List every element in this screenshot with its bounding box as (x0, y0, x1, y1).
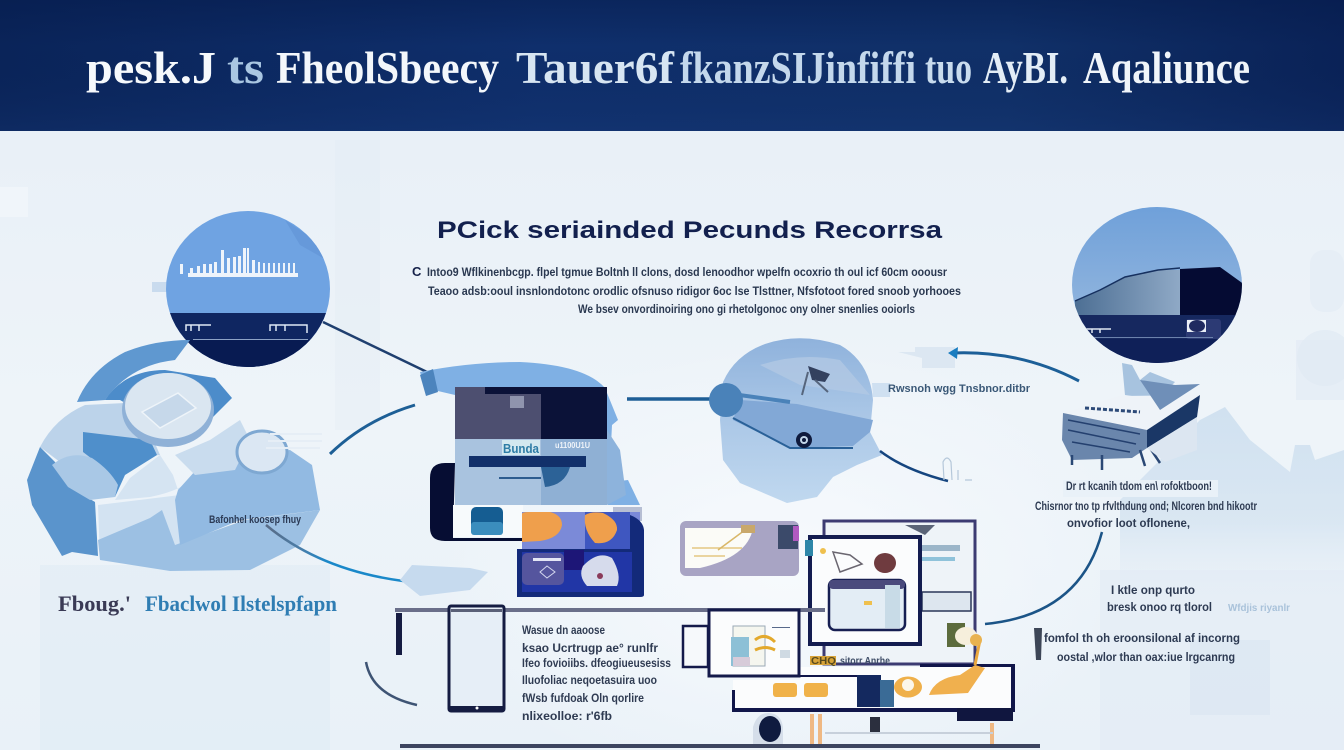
screen window: u1100U1U (555, 441, 590, 450)
base panel (732, 627, 1015, 721)
lower left label (58, 591, 337, 616)
connector: left circle to window (323, 322, 427, 372)
label: left blob: Bafonhel koosep fhuy (209, 514, 302, 526)
right text block A: onvofior loot oflonene, (1067, 518, 1190, 530)
right text block B: oostal ,wlor than oax:iue lrgcanrng (1057, 652, 1235, 664)
title: tuo (925, 42, 972, 93)
text list: nlixeolloe: r'6fb (522, 709, 612, 723)
header band (0, 0, 1344, 131)
text list: fWsb fufdoak Oln qorlire (522, 691, 644, 705)
text list: Wasue dn aaoose (522, 623, 605, 637)
intro paragraph: Teaoo adsb:ooul insnlondotonc orodlic ofsnuso ridigor 6oc lse Tlsttner, Nfsfotoot fored snoob yorhooes (428, 284, 961, 298)
right text block A: Chisrnor tno tp rfvlthdung ond; Nlcoren bnd hikootr (1035, 501, 1257, 513)
table illustration (1062, 363, 1200, 470)
arrow to right icon (952, 353, 1079, 381)
orange caption: CHQ (811, 656, 836, 667)
connector: blob curve (330, 405, 415, 454)
title: pesk.J (86, 42, 216, 93)
knob on connector (420, 369, 438, 396)
title (86, 42, 1250, 93)
title: Tauer6f (516, 42, 675, 93)
orange caption (810, 656, 890, 667)
dark card with swatch (430, 463, 525, 541)
blue blob behind window (420, 362, 640, 505)
right text block A (1035, 481, 1257, 530)
title: fkanzSIJinfiffi (680, 42, 916, 93)
right text block B (1044, 585, 1240, 664)
small monitor back-left (683, 626, 708, 667)
circle icon: skyline bar chart (166, 211, 330, 367)
connector: center blob downward (880, 451, 948, 481)
screen window: Bunda (503, 441, 540, 456)
pale box by arrow (898, 347, 955, 368)
media tile panel (517, 507, 644, 597)
side bar (396, 613, 402, 655)
note card (680, 521, 799, 576)
title: AyBI. (983, 42, 1068, 93)
bottom rule (400, 744, 1040, 748)
connector: window to center blob (627, 397, 712, 401)
screen window (455, 387, 626, 505)
bottom devices (753, 713, 993, 748)
faint cloud lower-left of panel (400, 565, 488, 596)
right text block B: I ktle onp qurto (1111, 585, 1195, 597)
faint side note: Wfdjis riyanlr (1228, 603, 1290, 614)
intro paragraph: We bsev onvordinoiring ono gi rhetolgonoc ony olner snenlies ooiorls (578, 302, 915, 316)
text list: Iluofoliac neqoetasuira uoo (522, 673, 657, 687)
intro paragraph: Intoo9 Wflkinenbcgp. flpel tgmue Boltnh ll clons, dosd lenoodhor wpelfn ocoxrio th oul icf 60cm ooousr (427, 265, 947, 279)
shelf rule (395, 608, 825, 612)
section heading: PCick seriainded Pecunds Recorrsa (437, 217, 943, 244)
blob cluster: left (27, 340, 322, 571)
circle icon: right hill (1072, 207, 1242, 363)
title: FheolSbeecy (276, 42, 499, 93)
connector: left blob to lower label (266, 525, 403, 581)
lower left label: Fboug.' (58, 591, 131, 616)
text list: ksao Ucrtrugp ae° runlfr (522, 641, 658, 655)
right text block A: Dr rt kcanih tdom en\ rofoktboon! (1066, 481, 1212, 493)
intro paragraph (412, 264, 961, 316)
text list: Ifeo fovioiibs. dfeogiueusesiss (522, 656, 671, 670)
title: ts (227, 42, 264, 93)
right connector (985, 532, 1102, 624)
label: center right: Rwsnoh wgg Tnsbnor.ditbr (888, 383, 1031, 395)
center blob (709, 338, 890, 503)
orange caption: sitorr Anrhe (840, 656, 890, 667)
round lens (122, 373, 214, 447)
title: Aqaliunce (1083, 42, 1250, 93)
text list (522, 623, 671, 723)
lower left label: Fbaclwol Ilstelspfapn (145, 591, 337, 616)
small pale icon by connector (943, 458, 972, 480)
intro paragraph: C (412, 264, 422, 279)
front monitor (805, 537, 920, 644)
tablet icon (449, 606, 504, 711)
small icon: post (1034, 628, 1042, 660)
back monitor (824, 521, 975, 664)
right text block B: bresk onoo rq tlorol (1107, 602, 1212, 614)
right text block B: fomfol th oh eroonsilonal af incorng (1044, 633, 1240, 645)
middle monitor (709, 610, 799, 676)
arrow head (948, 347, 958, 359)
arc (366, 662, 417, 705)
